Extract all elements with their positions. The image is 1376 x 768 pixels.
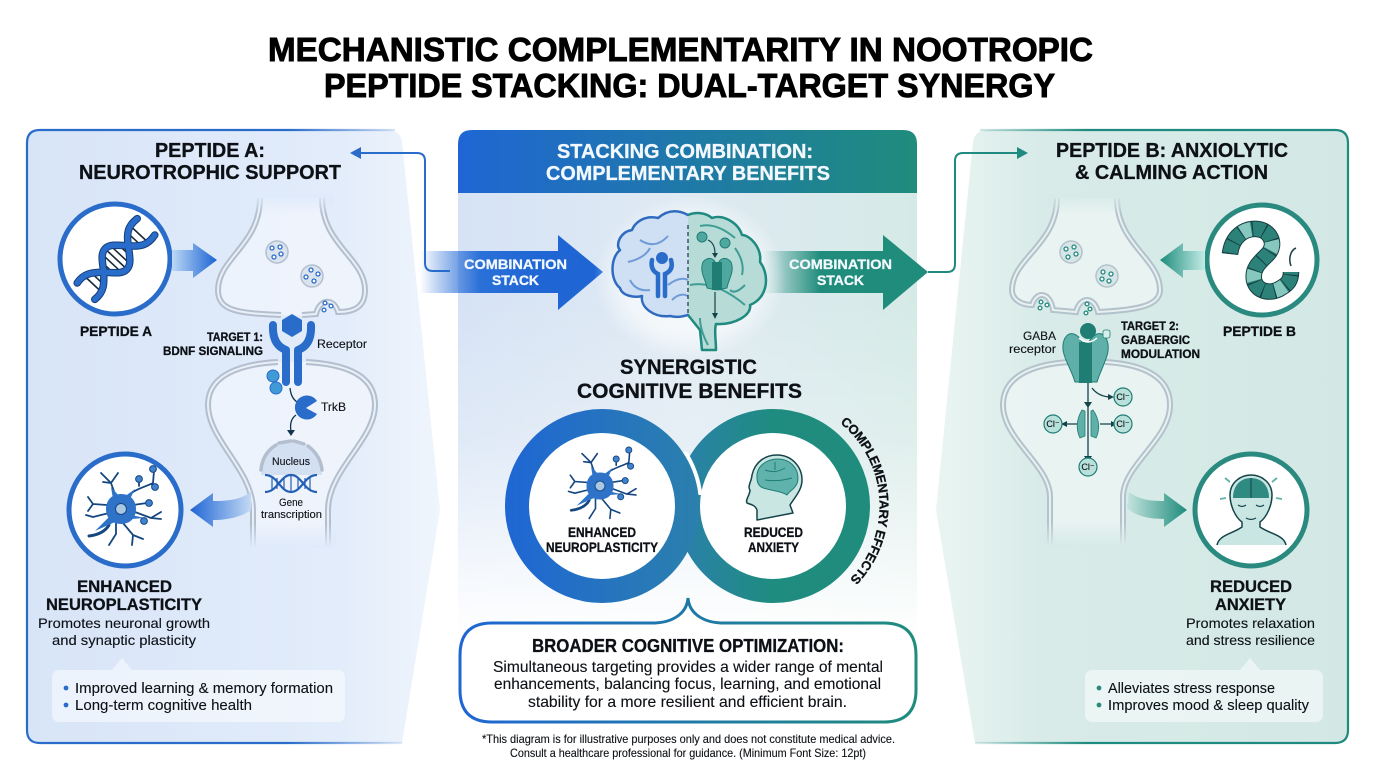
heading: stacking combination	[458, 130, 917, 193]
icon: split brain	[596, 207, 782, 352]
icon: chloride ions: Cl⁻	[1116, 419, 1130, 429]
icon: BDNF receptor	[267, 314, 311, 394]
label: GABA receptor: GABA	[1023, 329, 1056, 343]
arrow: peptide B to synapse	[1160, 243, 1205, 278]
label: enhanced neuroplasticity	[546, 525, 658, 555]
label: target 2: GABAERGIC	[1121, 333, 1190, 347]
text: reduced anxiety: and stress resilience	[1186, 632, 1315, 648]
arrow: combination stack left: COMBINATION	[464, 256, 567, 272]
synapse: postsynaptic terminal	[208, 362, 375, 548]
heading: synergistic cognitive benefits: COGNITIVE BENEFITS	[577, 380, 802, 403]
icon: chloride ions: Cl⁻	[1046, 419, 1060, 429]
text: enhanced neuroplasticity	[38, 577, 210, 648]
label: peptide B: PEPTIDE B	[1223, 323, 1296, 339]
label: receptor: Receptor	[317, 337, 367, 351]
arrow: peptide A to synapse	[172, 243, 217, 278]
callout: peptide B benefits	[1085, 658, 1323, 722]
icon: GABA receptor	[1063, 323, 1114, 462]
label: gene transcription: transcription	[261, 509, 322, 521]
synapse: presynaptic terminal B	[1012, 194, 1160, 315]
label: target 2: MODULATION	[1121, 347, 1200, 361]
text: enhanced neuroplasticity: NEUROPLASTICITY	[46, 595, 203, 614]
callout: peptide B benefits: Alleviates stress response	[1108, 680, 1275, 697]
heading: stacking combination: STACKING COMBINATION:	[557, 141, 813, 163]
icon: calm head	[1195, 454, 1307, 566]
label: gene transcription: Gene	[279, 497, 303, 509]
diagram: infinity rings	[503, 407, 858, 605]
heading: synergistic cognitive benefits: SYNERGISTIC	[620, 356, 757, 379]
arrow: combination stack left	[420, 235, 603, 310]
icon: chloride ions: Cl⁻	[1116, 392, 1130, 402]
text: reduced anxiety: Promotes relaxation	[1186, 615, 1315, 631]
callout: peptide A benefits: Long-term cognitive health	[75, 697, 252, 714]
label: GABA receptor	[1009, 329, 1056, 356]
icon: neuron	[69, 454, 181, 566]
footnote: *This diagram is for illustrative purposes only and does not constitute medical advice.	[482, 732, 895, 746]
label: GABA receptor: receptor	[1009, 342, 1056, 356]
text: reduced anxiety: ANXIETY	[1215, 595, 1287, 614]
heading: peptide B: & CALMING ACTION	[1075, 162, 1268, 184]
heading: peptide A: PEPTIDE A:	[155, 140, 265, 162]
icon: nucleus: Nucleus	[272, 456, 310, 468]
arrow: combination stack right: COMBINATION	[789, 256, 892, 272]
synapse: presynaptic terminal	[218, 194, 365, 315]
heading: peptide A: NEUROTROPHIC SUPPORT	[79, 162, 341, 184]
synapse: postsynaptic terminal B	[1003, 362, 1170, 546]
text: enhanced neuroplasticity: ENHANCED	[77, 577, 172, 596]
title: MECHANISTIC COMPLEMENTARITY IN NOOTROPIC	[268, 31, 1093, 68]
icon: peptide A DNA	[60, 204, 170, 314]
icon: peptide B chain	[1207, 205, 1317, 315]
text: enhanced neuroplasticity: and synaptic plasticity	[52, 632, 196, 648]
label: target 2	[1121, 319, 1200, 361]
footnote: Consult a healthcare professional for guidance. (Minimum Font Size: 12pt)	[510, 746, 866, 760]
icon: neuron small	[568, 447, 636, 518]
label: target 1	[163, 330, 263, 358]
panel: peptide B	[936, 130, 1348, 743]
heading: peptide B: PEPTIDE B: ANXIOLYTIC	[1056, 140, 1288, 162]
ring: enhanced neuroplasticity	[517, 421, 687, 591]
label: enhanced neuroplasticity: NEUROPLASTICITY	[546, 540, 658, 555]
icon: TrkB enzyme	[287, 388, 317, 436]
label: reduced anxiety: ANXIETY	[748, 540, 799, 555]
icon: brain receptor	[652, 252, 672, 296]
callout: peptide B benefits: Improves mood & sleep quality	[1108, 697, 1309, 714]
label: peptide A: PEPTIDE A	[80, 323, 152, 339]
arrow: combination stack right	[760, 235, 928, 310]
icon: nucleus	[261, 441, 322, 492]
callout: broader cognitive optimization	[460, 598, 916, 722]
connector: arrow to peptide A	[350, 147, 450, 271]
connector: arrow to peptide B	[928, 147, 1028, 272]
icon: chloride ions	[1044, 388, 1132, 476]
panel: stacking combination	[457, 130, 918, 640]
label: target 2: TARGET 2:	[1121, 319, 1179, 333]
text: enhanced neuroplasticity: Promotes neuronal growth	[38, 615, 210, 631]
label: TrkB: TrkB	[321, 400, 346, 414]
arrow: synapse to reduced anxiety	[1127, 492, 1187, 527]
arrow: transcription to neuroplasticity	[190, 492, 251, 527]
callout: broader cognitive optimization: enhancements, balancing focus, learning, and emotional	[494, 676, 881, 693]
heading: peptide B	[1056, 140, 1288, 184]
label: reduced anxiety	[744, 525, 803, 555]
label: enhanced neuroplasticity: ENHANCED	[568, 525, 636, 540]
footnote	[482, 732, 895, 760]
callout: broader cognitive optimization: stability for a more resilient and efficient brain.	[528, 694, 847, 711]
title	[268, 31, 1093, 104]
text: reduced anxiety: REDUCED	[1210, 577, 1292, 596]
heading: peptide A	[79, 140, 341, 184]
text: reduced anxiety	[1186, 577, 1315, 648]
title: PEPTIDE STACKING: DUAL-TARGET SYNERGY	[324, 67, 1055, 104]
icon: brain ion channel	[697, 232, 732, 319]
label: target 1: BDNF SIGNALING	[163, 344, 263, 358]
arrow: combination stack left: STACK	[492, 272, 539, 288]
label: gene transcription	[261, 497, 322, 521]
label: complementary effects: COMPLEMENTARY EFFECTS	[842, 418, 889, 584]
callout: broader cognitive optimization: BROADER COGNITIVE OPTIMIZATION:	[532, 636, 844, 656]
icon: chloride ions: Cl⁻	[1081, 462, 1095, 472]
label: reduced anxiety: REDUCED	[744, 525, 803, 540]
label: target 1: TARGET 1:	[207, 330, 263, 344]
icon: head with brain	[747, 455, 802, 520]
heading: synergistic cognitive benefits	[577, 356, 802, 403]
callout: peptide A benefits: Improved learning & memory formation	[75, 680, 333, 697]
ring: reduced anxiety	[688, 421, 858, 591]
heading: stacking combination: COMPLEMENTARY BENEFITS	[546, 163, 830, 185]
callout: broader cognitive optimization: Simultaneous targeting provides a wider range of mental	[493, 659, 883, 676]
panel: peptide A	[27, 130, 440, 743]
callout: peptide A benefits	[52, 658, 345, 722]
arrow: combination stack right: STACK	[817, 272, 864, 288]
